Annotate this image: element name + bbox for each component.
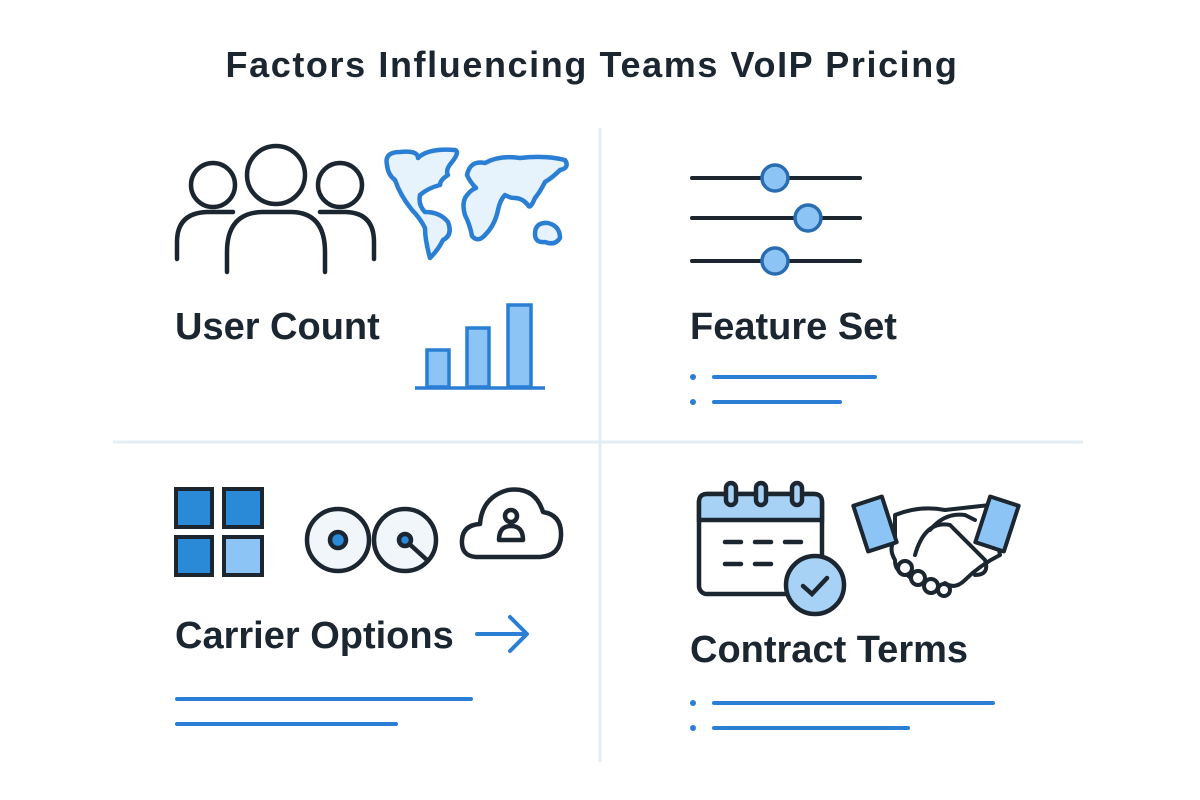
panel: feature set	[690, 165, 897, 405]
arrow	[477, 617, 527, 651]
panel: contract terms	[690, 483, 1019, 731]
icon: handshake	[853, 497, 1019, 596]
heading: feature set: Feature Set	[690, 306, 897, 348]
text lines	[177, 699, 471, 724]
icon: sliders	[692, 165, 860, 274]
icon: world map	[387, 150, 567, 258]
panel: carrier options	[175, 489, 561, 724]
heading: user count: User Count	[175, 306, 380, 348]
icon: calendar with check	[699, 483, 844, 614]
text lines	[690, 700, 993, 731]
icon: cloud user	[462, 489, 561, 557]
icon: discs	[307, 509, 436, 571]
bar chart	[415, 305, 545, 388]
icon: users	[177, 146, 374, 272]
icon: windows squares	[176, 489, 262, 575]
panel: user count	[175, 146, 567, 388]
heading: contract terms: Contract Terms	[690, 629, 968, 671]
heading: carrier options: Carrier Options	[175, 615, 454, 657]
title: Factors Influencing Teams VoIP Pricing	[226, 44, 958, 85]
text lines	[690, 374, 875, 405]
